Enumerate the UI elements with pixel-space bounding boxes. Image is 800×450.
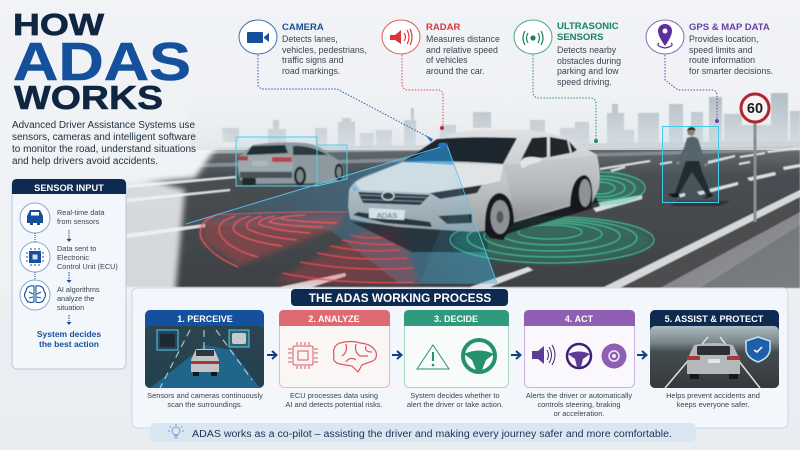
left white fade <box>0 170 185 295</box>
step 5: assist and protect: 5. ASSIST & PROTECT <box>665 314 764 324</box>
sensor input text steps <box>57 208 118 312</box>
callout: radar: of vehicles <box>426 55 468 65</box>
callout: gps and map data: GPS & MAP DATA <box>689 22 770 33</box>
icon: warning triangle <box>417 345 449 369</box>
sensor input text steps: Control Unit (ECU) <box>57 262 118 271</box>
camera cone overlay on hood <box>348 145 473 232</box>
icon: radar speaker <box>390 29 412 45</box>
road lane markings <box>127 147 800 287</box>
step 1: perceive: 1. PERCEIVE <box>177 314 233 324</box>
intro paragraph <box>12 120 196 167</box>
step 1 caption <box>147 391 263 409</box>
intro paragraph: sensors, cameras and intelligent software <box>12 132 196 143</box>
step 3 caption <box>407 391 503 409</box>
ultrasonic arcs <box>450 172 654 263</box>
sensor input header: SENSOR INPUT <box>34 183 104 193</box>
callout: camera: traffic signs and <box>282 55 344 65</box>
step 5: assist and protect <box>650 310 779 388</box>
windshield <box>403 137 517 164</box>
sensor input text steps: Electronic <box>57 253 89 262</box>
hood <box>355 162 503 193</box>
upper left white fade <box>0 105 225 185</box>
ultrasonic wash <box>452 217 652 263</box>
icon: speaker <box>532 345 555 365</box>
icon: brain <box>20 280 50 310</box>
car shadow front <box>352 222 488 252</box>
process heading: THE ADAS WORKING PROCESS <box>309 291 491 305</box>
arrow <box>392 351 402 359</box>
step 4 caption: or acceleration. <box>554 409 604 418</box>
arrow <box>637 351 646 359</box>
step 4 caption <box>526 391 632 418</box>
detection boxes on rear car <box>236 137 347 186</box>
callout: gps and map data: Provides location, <box>689 34 758 44</box>
icon: chip <box>288 342 318 369</box>
step 1: perceive <box>145 310 264 388</box>
icon: brain <box>334 342 376 372</box>
icon: shield <box>746 337 770 362</box>
speed limit sign: 60 <box>747 101 763 117</box>
callout: ultrasonic sensors: obstacles during <box>557 56 621 66</box>
lower intake <box>353 212 432 227</box>
callout: radar: RADAR <box>426 22 460 33</box>
curb and sidewalk <box>620 192 800 288</box>
radar arcs front <box>282 235 413 283</box>
step 3 caption: alert the driver or take action. <box>407 400 503 409</box>
mirror <box>520 157 542 169</box>
sensor input conclusion: the best action <box>39 339 99 349</box>
bottom tip bar: ADAS works as a co-pilot – assisting the driver and making every journey safer and more comfortable. <box>192 429 672 440</box>
arrow <box>267 351 276 359</box>
step 3: decide: 3. DECIDE <box>434 314 478 324</box>
skyline haze <box>190 100 800 150</box>
camera cone overlay on bumper <box>420 160 497 283</box>
sensor input conclusion: System decides <box>37 329 101 339</box>
icon: camera <box>247 32 269 43</box>
step 5 caption: Helps prevent accidents and <box>666 391 760 400</box>
callout: gps and map data: for smarter decisions. <box>689 66 773 76</box>
sensor input text steps: analyze the <box>57 294 94 303</box>
sensor input text steps: Data sent to <box>57 244 96 253</box>
intro paragraph: Advanced Driver Assistance Systems use <box>12 120 195 131</box>
step 4: act <box>524 310 635 388</box>
callout: camera: road markings. <box>282 66 340 76</box>
callout: camera: CAMERA <box>282 22 324 33</box>
speed limit sign <box>741 94 769 222</box>
callout: radar: and relative speed <box>426 45 498 55</box>
process heading <box>291 289 508 306</box>
callout: radar: around the car. <box>426 66 485 76</box>
camera cone <box>186 145 497 284</box>
icon: steering wheel <box>567 344 591 368</box>
callout: gps and map data: route information <box>689 55 755 65</box>
step 2: analyze <box>279 310 390 388</box>
callout: radar <box>382 20 500 76</box>
number plate: ADAS <box>377 211 397 220</box>
icon: car <box>20 203 50 233</box>
pedestrian detection box <box>662 126 718 202</box>
intro paragraph: and help drivers avoid accidents. <box>12 156 158 167</box>
callout: radar: Measures distance <box>426 34 500 44</box>
step 2 caption <box>285 391 383 409</box>
callout: ultrasonic sensors <box>514 20 621 87</box>
callout: ultrasonic sensors: SENSORS <box>557 32 603 43</box>
panel: ADAS working process <box>132 288 788 428</box>
callout: ultrasonic sensors: speed driving. <box>557 77 612 87</box>
radar wash left <box>200 214 345 266</box>
callout: ultrasonic sensors: parking and low <box>557 66 619 76</box>
door panels <box>503 155 599 221</box>
callout: ultrasonic sensors: Detects nearby <box>557 45 617 55</box>
step 1 caption: scan the surroundings. <box>167 400 243 409</box>
step 3 caption: System decides whether to <box>410 391 500 400</box>
step 1 caption: Sensors and cameras continuously <box>147 391 263 400</box>
callout: camera: Detects lanes, <box>282 34 338 44</box>
icon: light bulb <box>168 424 184 438</box>
icon: ultrasonic waves <box>523 31 543 45</box>
step 5 caption: keeps everyone safer. <box>677 400 749 409</box>
step 4: act: 4. ACT <box>565 314 594 324</box>
title: WORKS <box>14 80 163 117</box>
title: HOW <box>13 7 105 42</box>
bottom tip bar <box>150 423 696 442</box>
sensor input text steps: Real-time data <box>57 208 105 217</box>
step 2: analyze: 2. ANALYZE <box>308 314 360 324</box>
car body <box>348 130 600 232</box>
camera cone overlay on windshield <box>403 143 454 165</box>
side windows <box>520 137 547 162</box>
main silver car <box>348 130 600 240</box>
callout: ultrasonic sensors: ULTRASONIC <box>557 21 619 32</box>
rear car on left <box>238 142 344 186</box>
city skyline <box>222 93 800 152</box>
cone edge lines <box>186 145 497 283</box>
car shadow <box>500 190 600 236</box>
callout: gps and map data: speed limits and <box>689 45 753 55</box>
connector endpoint dots <box>425 119 719 148</box>
step 4 caption: controls steering, braking <box>537 400 621 409</box>
radar arcs left <box>200 212 348 267</box>
road surface <box>100 141 800 288</box>
perceive image <box>145 326 264 388</box>
icon: brake disc <box>602 344 626 368</box>
down arrows <box>68 230 70 323</box>
step 3: decide <box>404 310 509 388</box>
assist image <box>650 326 779 388</box>
callout: camera: vehicles, pedestrians, <box>282 45 367 55</box>
icon: ECU chip <box>20 242 50 272</box>
radar wash front <box>272 228 420 284</box>
step 2 caption: ECU processes data using <box>290 391 378 400</box>
sensor input text steps: situation <box>57 303 84 312</box>
emblem <box>382 192 394 200</box>
step 4 caption: Alerts the driver or automatically <box>526 391 632 400</box>
rear wheel <box>570 175 592 212</box>
intro paragraph: to monitor the road, understand situations <box>12 144 196 155</box>
headlights <box>430 185 482 199</box>
sensor input text steps: from sensors <box>57 217 100 226</box>
callout: camera <box>239 20 367 76</box>
sensor input conclusion <box>37 329 101 349</box>
front wheel <box>485 193 514 240</box>
step 2 caption: AI and detects potential risks. <box>285 400 383 409</box>
connector lines <box>258 55 717 141</box>
pedestrian <box>668 127 730 206</box>
arrow <box>511 351 520 359</box>
title: ADAS <box>13 32 191 92</box>
icon: steering wheel <box>463 340 495 372</box>
callout: gps and map data <box>646 20 773 76</box>
number plate <box>369 208 405 220</box>
sensor coverage graphics <box>186 145 654 284</box>
step 5 caption <box>666 391 760 409</box>
sensor input header <box>12 179 126 194</box>
sensor input text steps: AI algorithms <box>57 285 100 294</box>
grille <box>358 192 430 205</box>
icon: location pin <box>658 24 672 48</box>
panel: sensor input <box>12 179 126 369</box>
title <box>13 7 191 117</box>
